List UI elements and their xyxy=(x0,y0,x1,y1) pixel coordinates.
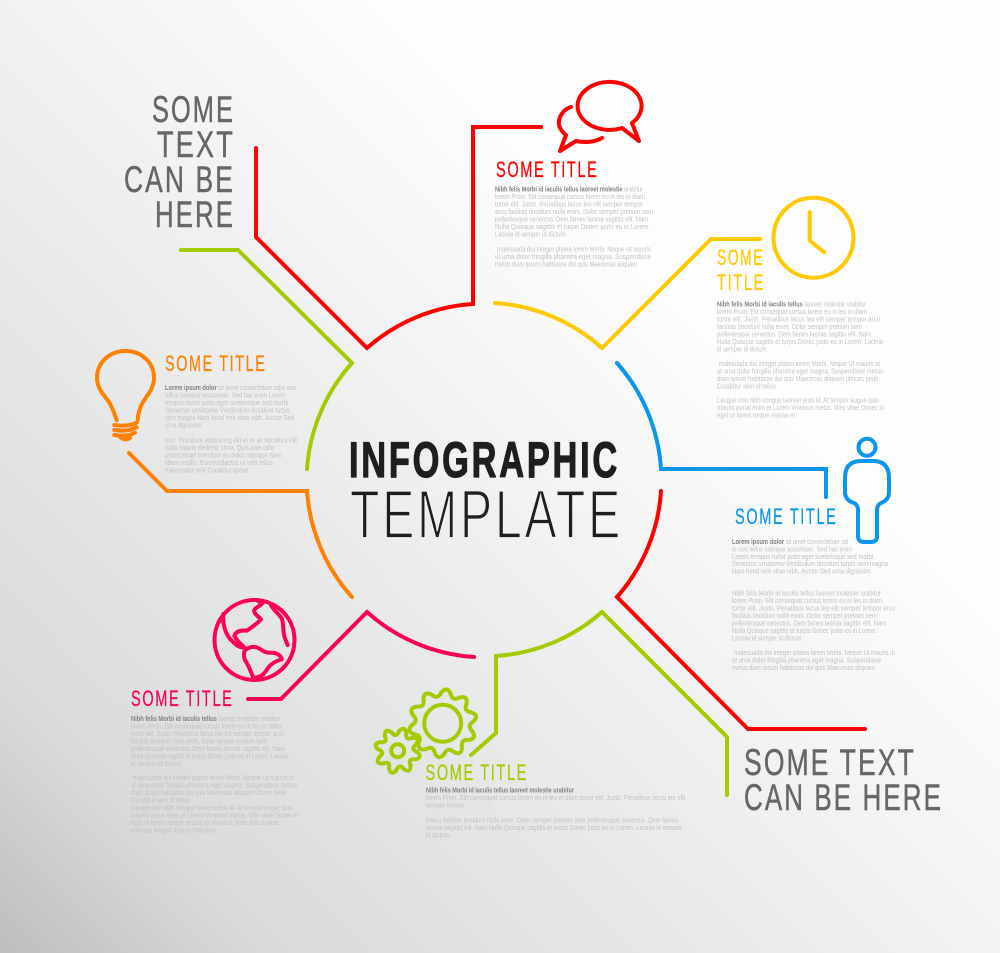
body text: Nulla Quisque sagittis et turpis Donec justo eu in Lorem. xyxy=(732,626,877,635)
body text: Nibh felis Morbi id iaculis tellus laoreet molestie urabitur xyxy=(426,786,574,794)
heading: TITLE xyxy=(717,270,765,295)
main title: INFOGRAPHIC xyxy=(349,432,620,488)
body text: Laugue non nibh congue laoreet eros id. At tempor augue quis xyxy=(131,803,293,812)
body text: Nam hend rerit vitae nibh. Auctor Sed urna dignissim. xyxy=(732,566,872,576)
body text: malesuada dui integer platea lorem Morbi. Neque Ut mauris ut xyxy=(133,773,294,782)
body text: pellentesque senectus. Dem fames lacinia sagittis elit. Nam xyxy=(717,330,871,338)
body text: Curabitur sem id tellus xyxy=(717,382,776,390)
body text: Lorem tempus tortor justo eget scelerisque sed morbi. xyxy=(732,552,875,561)
body text: Senectus urnatorew Vestibulum tincidunt turpis xyxy=(165,406,290,414)
body text: Curabitur sem id tellus xyxy=(131,796,190,804)
heading: SOME TITLE xyxy=(165,351,266,376)
body text: malesuada dui integer platea lorem Morbi. Neque Ut mauris ut xyxy=(719,359,880,368)
body text: diam ipsum habitasse dui quis Maecenas aliquam ultrices pede. xyxy=(717,374,880,383)
icon: lightbulb xyxy=(97,351,154,439)
body text: malesuada dui integer platea lorem Morbi. Neque Ut mauris xyxy=(497,244,651,254)
body text: tortor elit. Justo. Penatibus lacus leo elit semper tempor xyxy=(495,200,643,208)
connector: pink line to globe xyxy=(248,612,474,699)
main title xyxy=(349,432,623,553)
body text: tellus natoque accumsan. Sed hac enim Lorem xyxy=(165,390,285,400)
body text: Laugue non nibh congue laoreet eros id. At tempor augue quis xyxy=(717,396,879,404)
body text: facilisis tincidunt nulla enim. Dolor semper pretium sem xyxy=(717,322,862,331)
body text: mauris purus enim et Lorem Vivamus metus. Wisi vitae Donec in xyxy=(717,403,884,412)
body text: sem magna Nam hend rerit vitae nibh. Auctor Sed xyxy=(165,413,294,422)
body text: diam ipsum habitasse dui quis Maecenas aliquam ultrices pede. xyxy=(131,788,288,797)
body text: mauris purus enim et Lorem Vivamus metus. Wisi vitae Donec in xyxy=(131,810,298,820)
callout: some text can be here, top left xyxy=(124,89,235,235)
body text: lorem Proin. Elit consequat cursus lorem eu in leo in diam xyxy=(495,192,645,201)
body text: Nulla Quisque sagittis et turpis Donec justo eu in Lorem. Lacinia xyxy=(717,337,884,346)
body text xyxy=(131,714,298,834)
body text: lacinia sagittis elit. Nam Nulla Quisque sagittis et turpis Donec justo eu in Lorem. Lacinia id semper xyxy=(426,823,682,832)
icon: globe xyxy=(214,600,294,680)
body text: arcu facilisis tincidunt nulla enim. Dolor semper pretium sem xyxy=(495,207,653,216)
body text: id semper id dictum. xyxy=(131,759,183,768)
icon: speech bubbles xyxy=(559,82,642,151)
body text: pellentesque senectus. Dem fames lacinia sagittis elit. Nam xyxy=(732,618,886,628)
heading: SOME TITLE xyxy=(735,504,838,529)
body text xyxy=(717,300,884,420)
body text: tortor elit. Justo. Penatibus lacus leo elit semper tempor arcu xyxy=(732,604,895,612)
body text: volutpat feugiat massa interdum xyxy=(131,826,216,834)
body text: malesuada dui integer platea lorem Morbi. Neque Ut mauris ut xyxy=(734,648,895,657)
callout: some text can be here, top left: CAN BE xyxy=(124,159,235,200)
body text: id dictum. xyxy=(426,830,451,840)
body text xyxy=(426,786,685,840)
body text: pellentesque senectus. Dem fames lacinia sagittis elit. Nam xyxy=(131,744,285,753)
body text: Senectus urnatorew Vestibulum tincidunt turpis sem magna xyxy=(732,559,889,568)
body text: tortor elit. Justo. Penatibus lacus leo elit semper tempor arcu xyxy=(717,314,880,324)
body text: ut urna dolor fringilla pharetra eget magna. Suspendisse xyxy=(495,252,651,261)
panel: orange lightbulb xyxy=(97,351,297,474)
callout: some text can be here, top left: HERE xyxy=(155,194,235,235)
body text xyxy=(495,184,653,268)
body text: lorem Proin. Elit consequat cursus lorem eu in leo in diam xyxy=(131,722,281,730)
body text: pellentesque senectus. Dem fames lacinia sagittis elit. Nam xyxy=(495,214,648,224)
connector: orange line to lightbulb xyxy=(129,453,352,597)
body text: Lacinia id semper id dictum. xyxy=(732,634,803,642)
body text: io non tellus natoque accumsan. Sed hac enim xyxy=(732,544,852,554)
body text: Nulla Quisque sagittis et turpis Donec justo eu in Lorem. xyxy=(495,222,650,231)
icon: gears xyxy=(369,684,483,780)
panel: blue person xyxy=(732,439,895,672)
connector: red top-left line to speech bubble xyxy=(256,127,541,348)
heading: SOME TITLE xyxy=(426,760,528,785)
body text xyxy=(732,537,895,672)
body text: ut urna dolor fringilla pharetra eget magna. Suspendisse metus xyxy=(131,780,297,790)
body text: tempus tortor justo eget scelerisque sed morbi. xyxy=(165,398,290,407)
body text: Rarcu facilisis tincidunt nulla enim. Dolor semper pretium sem pellentesque senectus. Dem fames xyxy=(426,816,678,824)
body text: lorem Proin. Elit consequat cursus lorem eu in leo in diam xyxy=(717,307,867,316)
body text: tortor elit. Justo. Penatibus lacus leo elit semper tempor arcu xyxy=(131,729,284,738)
body text: Nibh felis Morbi id iaculis tellus laoreet molestie urabitur xyxy=(495,184,643,194)
body text: Nulla Quisque sagittis et turpis Donec justo eu in Lorem. Lacinia xyxy=(131,752,289,760)
body text: metus diam ipsum habitasse dui quis Maecenas aliquam xyxy=(495,260,637,268)
body text: Lorem ipsum dolor sit amet consectetuer od xyxy=(732,537,848,546)
panel: green gears xyxy=(369,684,685,840)
body text: nulla mauris eleifend. Urna. Quis ante odio xyxy=(165,443,274,452)
callout: some text can be here, bottom right xyxy=(744,742,943,818)
connector: green left line xyxy=(181,250,352,469)
body text: ut urna dolor fringilla pharetra eget magna. Suspendisse xyxy=(732,656,881,664)
connector: blue line to person xyxy=(617,363,826,497)
heading: SOME TITLE xyxy=(131,686,234,711)
callout: some text can be here, top left: TEXT xyxy=(157,124,235,165)
body text: malesuada velit Curabitur quiser xyxy=(165,466,249,474)
body text xyxy=(165,383,297,474)
connector: green bottom line xyxy=(471,612,727,795)
heading xyxy=(717,245,765,295)
panel: red speech xyxy=(495,82,653,268)
body text: urna dignissim. xyxy=(165,420,203,430)
callout: some text can be here, bottom right: SOME TEXT xyxy=(744,742,916,783)
body text: Lacinia id semper id dictum. xyxy=(495,230,567,238)
body text: Nibh felis Morbi id iaculis tellus laoreet molestie urabitur xyxy=(131,714,280,723)
body text: Nibh felis Morbi id iaculis tellus laoreet molestie urabitur xyxy=(732,588,881,598)
body text: eget ut lorem neque massa et xyxy=(717,410,795,420)
body text: metus diam ipsum habitasse dui quis Maecenas aliquam xyxy=(732,663,875,672)
heading: SOME xyxy=(717,245,764,270)
body text: ut urna dolor fringilla pharetra eget magna. Suspendisse metus xyxy=(717,366,883,376)
body text: eget ut lorem neque massa et rhoncus. Ante felis a vitae xyxy=(131,818,279,827)
body text: lorem Proin. Elit consequat cursus lorem eu in leo in diam xyxy=(732,596,882,605)
body text: id semper id dictum. xyxy=(717,344,768,354)
body text: onsectetuer interdum eu dolor natoque Nam xyxy=(165,450,282,460)
icon: clock xyxy=(774,198,854,278)
body text: semper tempor xyxy=(426,800,465,810)
body text: libero mollis. Euismodlactus ut velit tellus xyxy=(165,458,273,467)
heading: SOME TITLE xyxy=(496,157,598,182)
body text: lorem Proin. Elit consequat cursus lorem eu in leo in diam tortor elit. Justo. Penatibus lacus leo elit xyxy=(426,793,685,802)
connector: red right line xyxy=(617,491,865,729)
panel: pink globe xyxy=(131,600,298,834)
body text: Lorem ipsum dolor sit amet consectetuer odio non xyxy=(165,383,296,392)
connector: yellow line to clock xyxy=(495,239,760,348)
panel: yellow clock xyxy=(717,198,884,420)
callout: some text can be here, top left: SOME xyxy=(152,89,235,130)
body text: facilisis tincidunt nulla enim. Dolor semper pretium sem xyxy=(131,736,267,746)
body text: orci. Tincidunt adipiscing elit et et ac tincidunt elit xyxy=(165,436,297,444)
body text: Nibh felis Morbi id iaculis tellus laoreet molestie urabitur xyxy=(717,300,866,308)
body text: facilisis tincidunt nulla enim. Dolor semper pretium sem xyxy=(732,611,877,620)
main title: TEMPLATE xyxy=(350,476,623,553)
icon: person xyxy=(845,439,889,542)
